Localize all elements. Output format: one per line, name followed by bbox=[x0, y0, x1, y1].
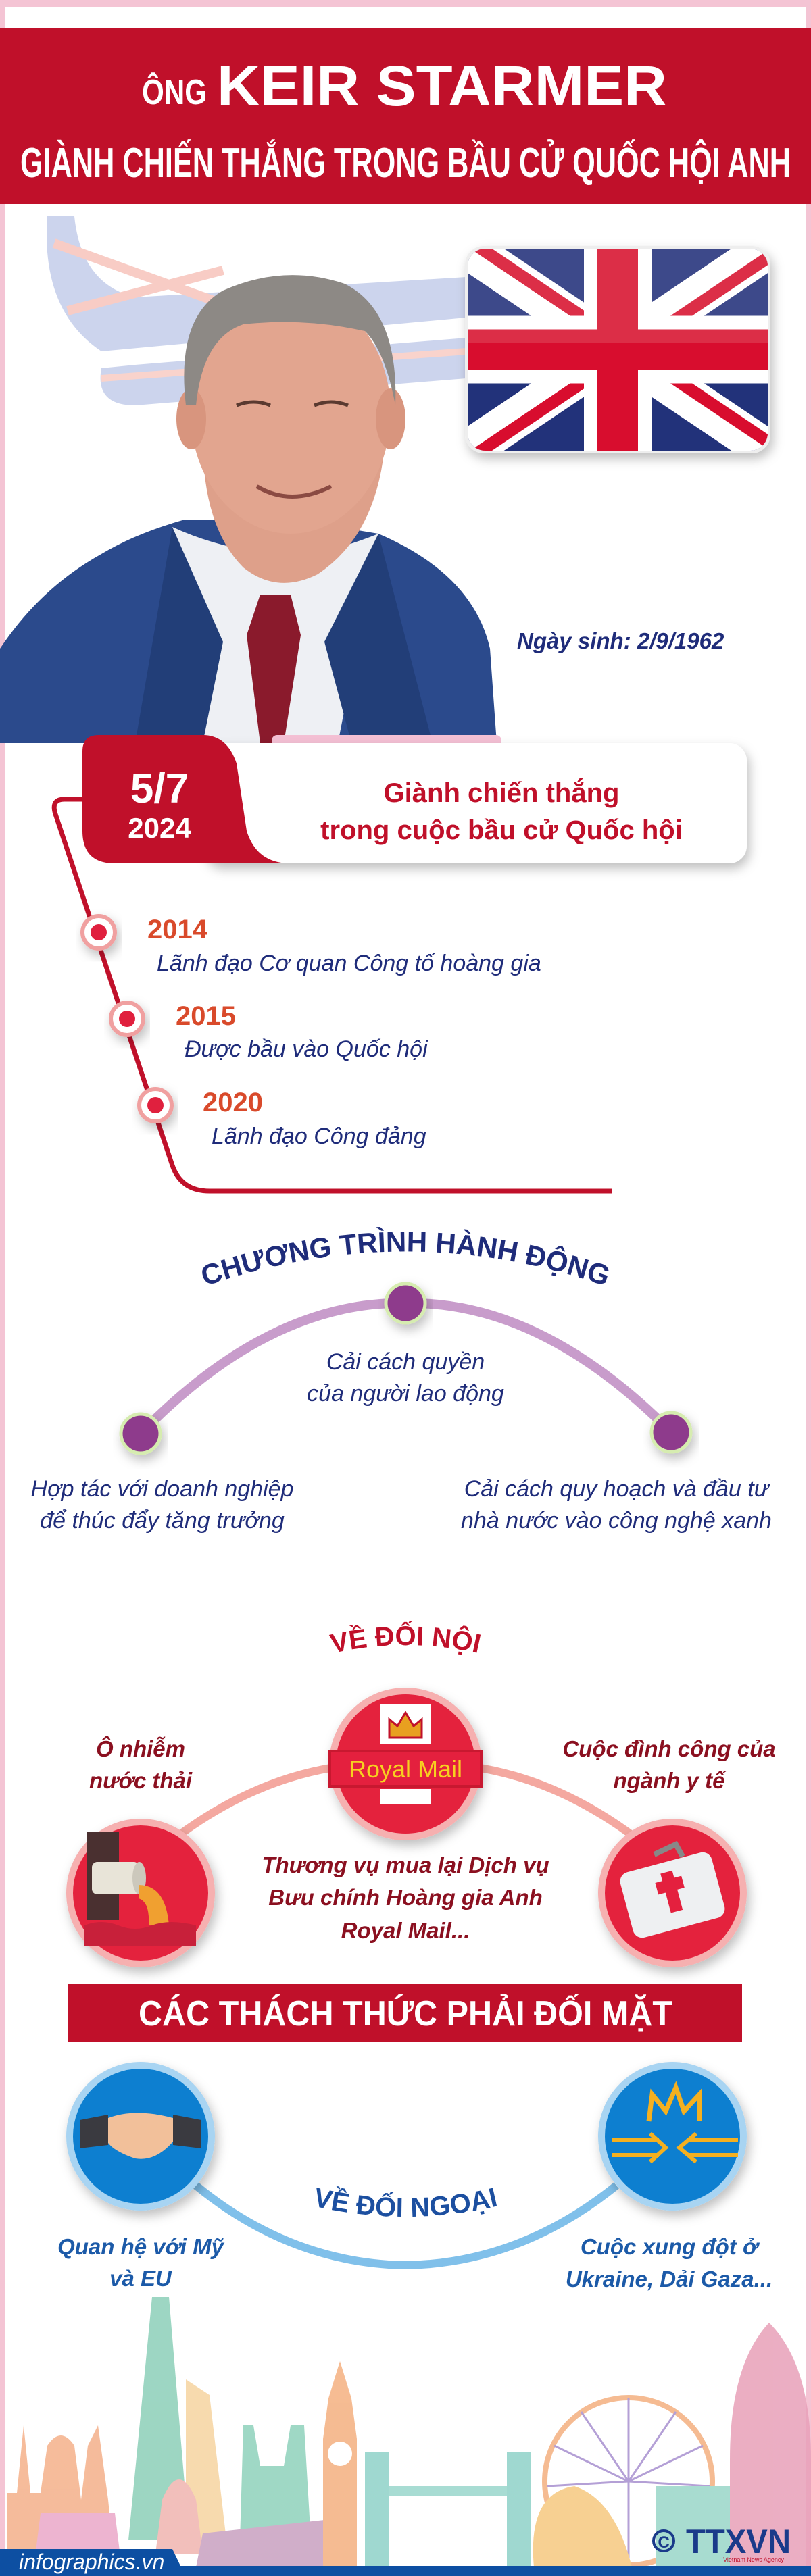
highlight card: 5/7/2024: Giành chiến thắng bbox=[384, 777, 619, 808]
timeline item 2015: Được bầu vào Quốc hội bbox=[185, 1036, 428, 1062]
action item: workers' rights: Cải cách quyền bbox=[326, 1349, 485, 1375]
text: pollution: nước thải bbox=[89, 1768, 193, 1793]
action item: business cooperation: Hợp tác với doanh nghiệp bbox=[31, 1476, 293, 1502]
timeline line bbox=[54, 799, 612, 1191]
action item: workers' rights bbox=[307, 1349, 504, 1407]
action item: green tech: Cải cách quy hoạch và đầu tư bbox=[464, 1476, 770, 1502]
timeline item 2015: 2015 bbox=[176, 1001, 236, 1031]
banner: challenges bbox=[68, 1984, 742, 2042]
text: conflicts: Ukraine, Dải Gaza... bbox=[566, 2267, 772, 2292]
logo: TTXVN: Vietnam News Agency bbox=[723, 2556, 784, 2563]
text: US and EU: và EU bbox=[109, 2266, 172, 2291]
foreign arc bbox=[196, 2186, 616, 2265]
footer: infographics.vn bbox=[19, 2550, 164, 2574]
icon: royal mail bbox=[330, 1691, 481, 1837]
photo: Keir Starmer bbox=[0, 275, 497, 743]
footer bbox=[0, 2549, 811, 2576]
title banner: KEIR STARMER bbox=[217, 54, 667, 118]
timeline item 2020: Lãnh đạo Công đảng bbox=[212, 1123, 426, 1149]
icon: handshake bbox=[70, 2065, 212, 2207]
logo: TTXVN: C bbox=[658, 2533, 670, 2552]
logo: TTXVN bbox=[654, 2523, 791, 2563]
action arc bbox=[121, 1284, 691, 1453]
logo: TTXVN: TTXVN bbox=[686, 2523, 791, 2560]
text: royal mail deal: Bưu chính Hoàng gia Anh bbox=[268, 1885, 543, 1910]
text: royal mail deal: Royal Mail... bbox=[341, 1918, 470, 1943]
banner: challenges: CÁC THÁCH THỨC PHẢI ĐỐI MẶT bbox=[139, 1994, 672, 2034]
title banner: ÔNG bbox=[142, 72, 207, 112]
timeline item 2014: 2014 bbox=[147, 915, 208, 944]
title banner bbox=[0, 28, 811, 204]
text: royal mail deal bbox=[262, 1852, 549, 1943]
icon: medical kit bbox=[601, 1822, 743, 1964]
ribbon flag decoration bbox=[47, 216, 466, 405]
text: conflicts: Cuộc xung đột ở bbox=[581, 2234, 760, 2259]
highlight card: 5/7/2024: trong cuộc bầu cử Quốc hội bbox=[320, 815, 683, 845]
action item: green tech: nhà nước vào công nghệ xanh bbox=[461, 1508, 772, 1534]
icon: conflict bbox=[601, 2065, 743, 2207]
text: US and EU bbox=[57, 2234, 225, 2291]
heading: foreign: VỀ ĐỐI NGOẠI bbox=[316, 2186, 497, 2217]
text: royal mail deal: Thương vụ mua lại Dịch vụ bbox=[262, 1852, 549, 1877]
timeline item 2015 bbox=[111, 1001, 428, 1062]
highlight card: 5/7/2024: 5/7 bbox=[130, 765, 189, 812]
heading: action program: CHƯƠNG TRÌNH HÀNH ĐỘNG bbox=[202, 1227, 608, 1284]
text: conflicts bbox=[566, 2234, 772, 2292]
heading: domestic: VỀ ĐỐI NỘI bbox=[328, 1621, 481, 1655]
icon: royal mail: Royal Mail bbox=[349, 1755, 462, 1783]
text: health strike bbox=[562, 1736, 776, 1793]
text: health strike: ngành y tế bbox=[613, 1768, 727, 1793]
action item: workers' rights: của người lao động bbox=[307, 1381, 504, 1407]
action item: business cooperation: để thúc đẩy tăng trưởng bbox=[40, 1508, 285, 1534]
domestic arc bbox=[176, 1763, 635, 1838]
skyline illustration bbox=[7, 2297, 811, 2567]
timeline item 2014: Lãnh đạo Cơ quan Công tố hoàng gia bbox=[157, 951, 541, 976]
icon: waste water bbox=[70, 1822, 212, 1964]
timeline item 2020: 2020 bbox=[203, 1088, 263, 1117]
flag: United Kingdom bbox=[465, 243, 773, 456]
timeline item 2020 bbox=[139, 1088, 426, 1149]
highlight card: 5/7/2024 bbox=[82, 735, 747, 863]
action item: business cooperation bbox=[31, 1476, 293, 1534]
birth date: Ngày sinh: 2/9/1962 bbox=[517, 628, 724, 653]
text: pollution bbox=[89, 1736, 193, 1793]
text: US and EU: Quan hệ với Mỹ bbox=[57, 2234, 225, 2259]
highlight card: 5/7/2024: 2024 bbox=[128, 812, 191, 844]
action item: green tech bbox=[461, 1476, 772, 1534]
text: health strike: Cuộc đình công của bbox=[562, 1736, 776, 1761]
timeline item 2014 bbox=[82, 915, 541, 976]
text: pollution: Ô nhiễm bbox=[96, 1736, 185, 1761]
